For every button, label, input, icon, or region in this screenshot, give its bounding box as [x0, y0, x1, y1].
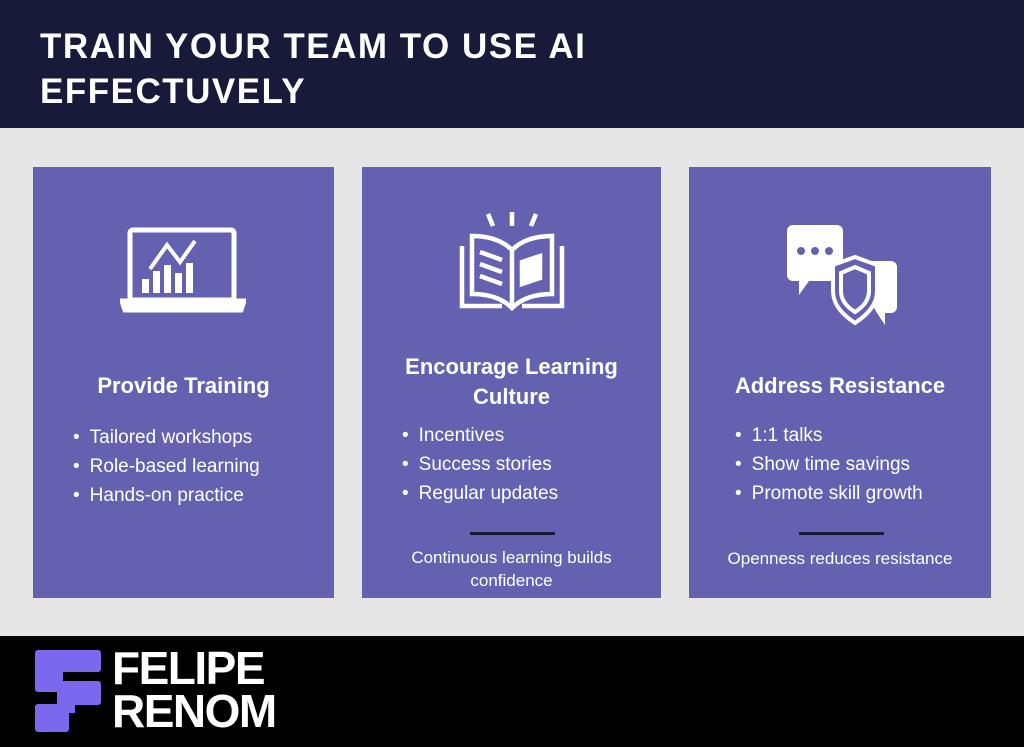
caption: Continuous learning builds: [411, 548, 612, 567]
heading: [405, 354, 618, 409]
brand name: [112, 642, 276, 737]
bullets: Hands-on practice: [90, 485, 244, 506]
panel: encourage learning culture: [362, 167, 661, 598]
title: [40, 27, 586, 111]
brand name: RENOM: [112, 685, 276, 737]
footer band: [0, 636, 1024, 747]
title: TRAIN YOUR TEAM TO USE AI: [40, 27, 586, 66]
caption: Openness reduces resistance: [728, 549, 952, 568]
heading: Encourage Learning: [405, 354, 618, 379]
bullets: 1:1 talks: [752, 425, 822, 446]
brand name: FELIPE: [112, 642, 264, 694]
bullets: Incentives: [419, 425, 504, 446]
logo mark: [35, 650, 101, 732]
bullets: Tailored workshops: [90, 427, 252, 448]
bullets: Promote skill growth: [752, 483, 923, 504]
heading: Provide Training: [97, 373, 270, 398]
heading: Address Resistance: [735, 373, 945, 398]
panel: provide training: [33, 167, 334, 598]
bullets: Show time savings: [752, 454, 910, 475]
icon: open book: [460, 212, 564, 311]
bullets: Success stories: [419, 454, 552, 475]
bullets: Role-based learning: [90, 456, 260, 477]
title: EFFECTUVELY: [40, 72, 306, 111]
icon: laptop chart: [120, 228, 246, 312]
divider: [470, 532, 555, 535]
icon: chat with shield: [787, 225, 897, 326]
bullets: Regular updates: [419, 483, 558, 504]
bullets: [736, 425, 923, 504]
heading: Culture: [473, 384, 550, 409]
bullets: [402, 425, 558, 504]
header band: [0, 0, 1024, 128]
caption: [411, 548, 612, 590]
panel: address resistance: [689, 167, 991, 598]
caption: confidence: [470, 571, 553, 590]
divider: [799, 532, 884, 535]
bullets: [74, 427, 260, 506]
